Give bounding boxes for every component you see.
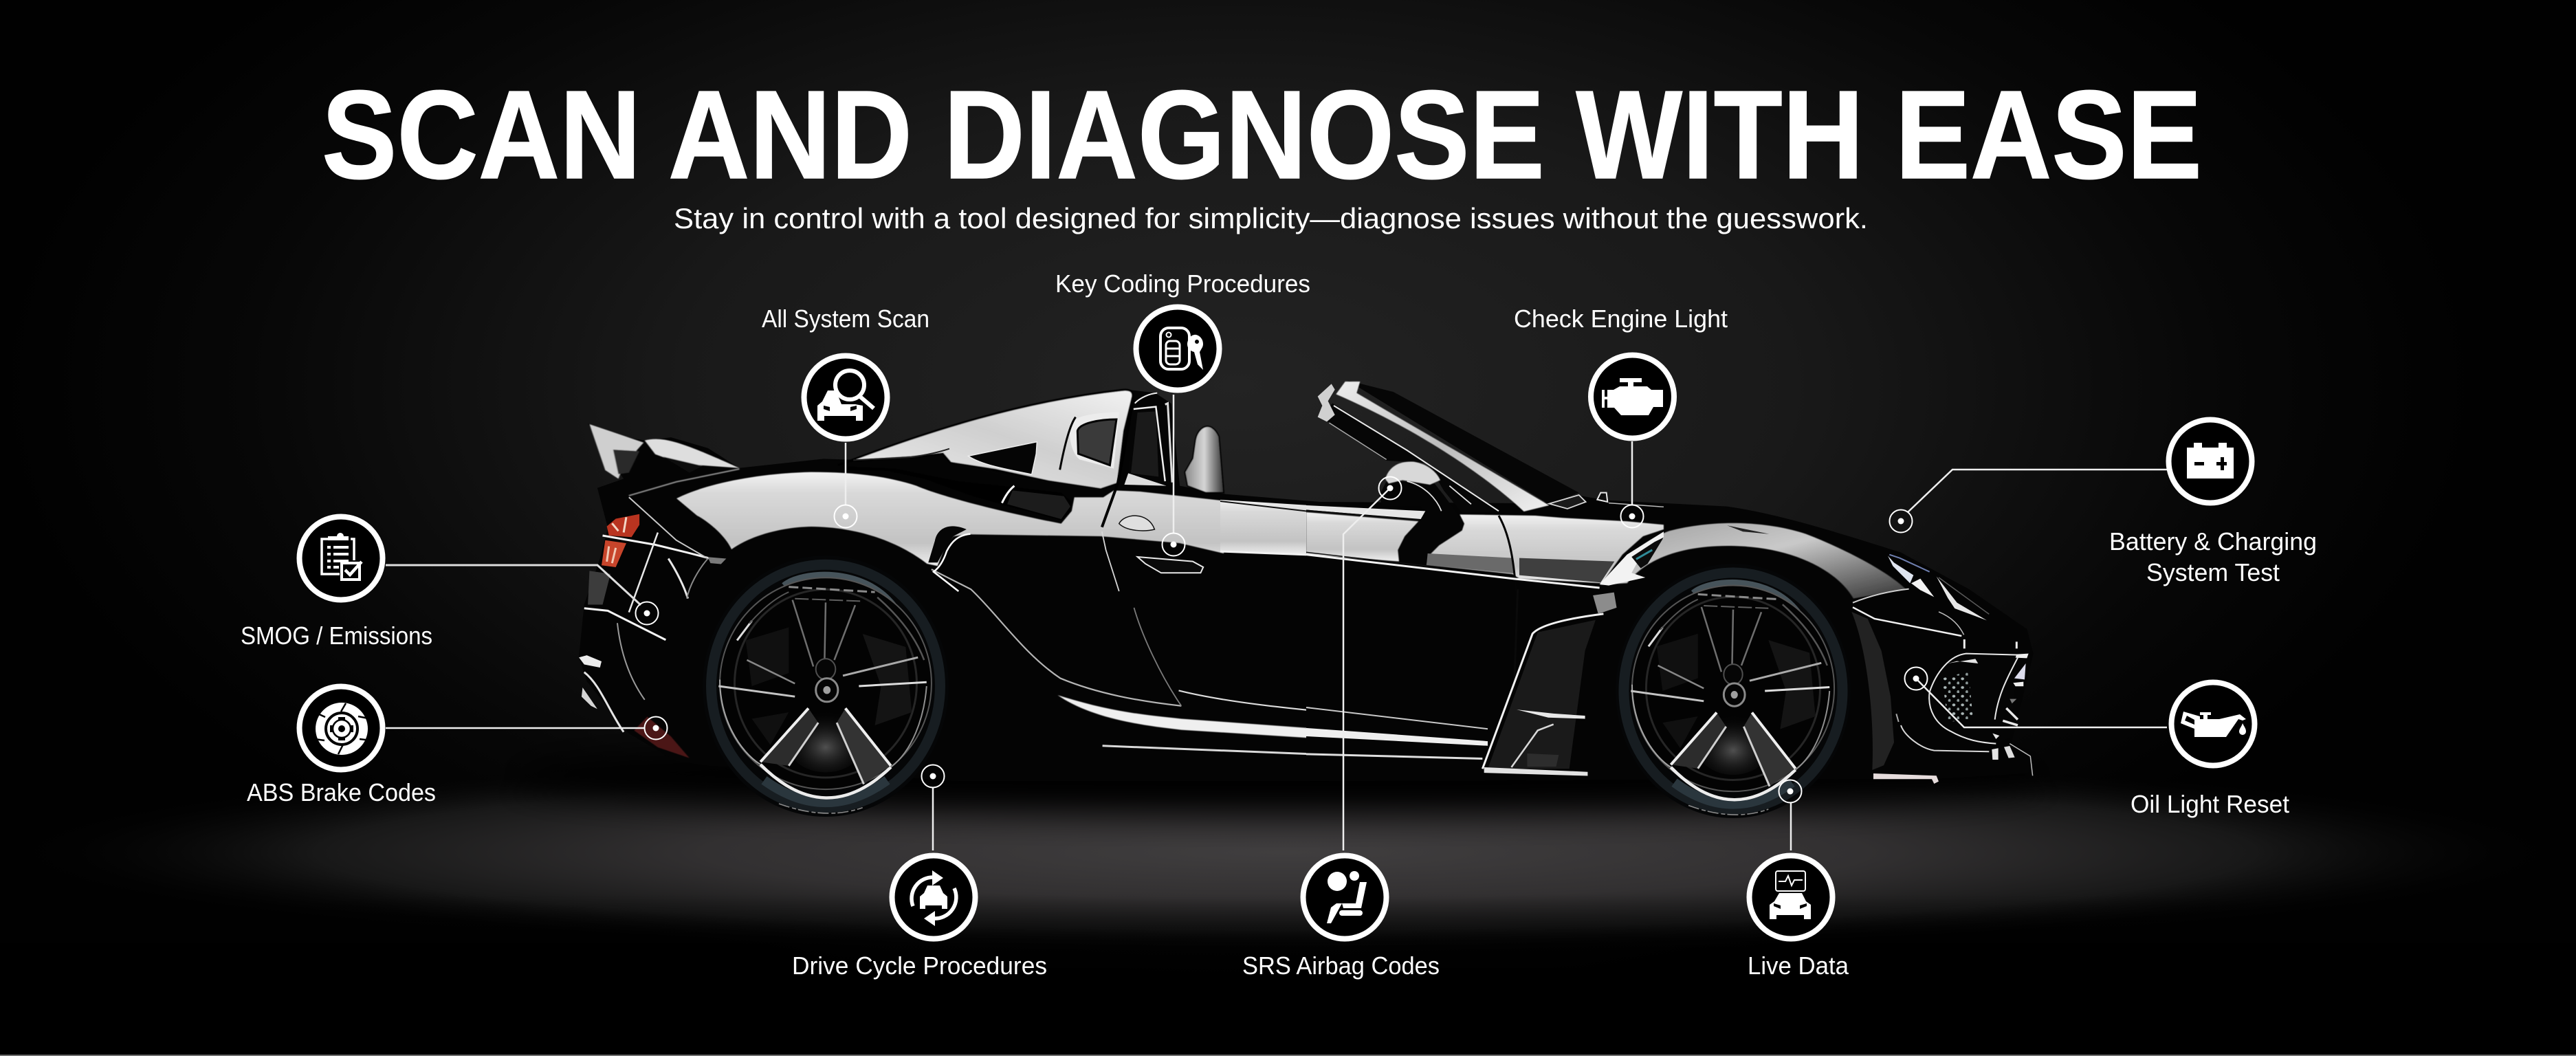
icon: clipboard and checkbox — [322, 533, 362, 580]
icon: circular arrows with car — [912, 870, 956, 926]
icon ring — [300, 517, 382, 600]
body crease line — [1306, 555, 1600, 588]
label: SMOG / Emissions — [241, 622, 432, 650]
callout: all system scan — [762, 305, 929, 528]
side intake — [1488, 620, 1596, 769]
icon: airbag seat — [1327, 871, 1367, 923]
silver cowl panel — [1427, 514, 1664, 583]
car ground shadow — [509, 741, 2049, 813]
icon ring — [892, 855, 975, 939]
icon: key fob and key — [1160, 328, 1203, 370]
leader line — [386, 565, 641, 605]
front arch strip — [1851, 612, 1894, 770]
cowl lower shade — [1427, 553, 1514, 573]
side quarter window — [1060, 412, 1119, 470]
label: ABS Brake Codes — [247, 778, 436, 806]
target marker — [1889, 510, 1913, 532]
callout: battery and charging system test — [1889, 419, 2317, 586]
target marker — [1162, 534, 1185, 556]
side mirror — [1385, 461, 1440, 485]
icon: car with magnifier — [817, 371, 874, 421]
silver door panel — [1306, 512, 1418, 562]
icon: battery — [2187, 443, 2234, 478]
lower door seam and character line — [932, 569, 1181, 706]
icon ring — [2171, 682, 2255, 766]
front nose details — [1851, 555, 2033, 784]
icon: oil can — [2181, 712, 2246, 737]
door seam lower — [1514, 589, 1518, 690]
label: Live Data — [1748, 952, 1849, 980]
icon: engine — [1602, 378, 1663, 415]
leader line — [1631, 441, 1633, 505]
cockpit pillar — [1124, 393, 1180, 487]
callout: drive cycle procedures — [792, 764, 1047, 980]
icon: monitor above car — [1770, 871, 1811, 919]
leader line — [1916, 679, 2167, 727]
rear deck panel — [837, 390, 1133, 490]
door seam — [1499, 516, 1516, 591]
icon ring — [1303, 855, 1386, 939]
bottom fade — [0, 894, 2576, 1056]
fender lines — [1853, 589, 1909, 603]
windshield silver frame — [1336, 382, 1549, 512]
label: Key Coding Procedures — [1055, 270, 1310, 298]
windshield lower black frame — [1320, 404, 1499, 513]
windshield dark strip — [1347, 380, 1579, 504]
target marker — [1621, 505, 1643, 528]
callout: live data — [1748, 780, 1849, 980]
leader line — [1908, 470, 2167, 512]
door top dark line — [1220, 501, 1310, 512]
icon ring — [1136, 307, 1220, 390]
title: SCAN AND DIAGNOSE WITH EASE — [322, 64, 2202, 205]
front splitter — [1873, 773, 1939, 784]
target marker — [1379, 477, 1401, 499]
cowl details — [1549, 495, 1586, 509]
callout: srs airbag codes — [1242, 477, 1440, 980]
rear diffuser glow — [634, 716, 690, 758]
side mirror arm — [1380, 481, 1462, 566]
target marker — [835, 505, 857, 528]
subtitle: Stay in control with a tool designed for simplicity—diagnose issues without the guesswork. — [674, 202, 1868, 234]
bumper details — [1896, 714, 2033, 776]
target marker — [1904, 667, 1928, 690]
windshield end cap — [1318, 384, 1335, 421]
leader line — [845, 443, 846, 505]
headlight — [1888, 555, 1989, 620]
floor light — [0, 749, 2576, 956]
label: All System Scan — [762, 305, 929, 333]
leader line — [1173, 395, 1174, 534]
callout: smog and emissions — [241, 517, 659, 650]
door seam — [1102, 399, 1134, 527]
triangular rear window — [968, 442, 1037, 474]
label: Oil Light Reset — [2131, 790, 2289, 818]
rear panel lines — [603, 536, 710, 558]
car rear deck and cockpit — [676, 390, 1224, 591]
front wheel — [1616, 564, 1851, 818]
front body silhouette — [1306, 496, 2034, 781]
sports car illustration — [579, 380, 2034, 818]
leader line — [1343, 488, 1390, 850]
label: Battery & Charging — [2109, 527, 2317, 556]
leader line — [932, 787, 934, 850]
label: SRS Airbag Codes — [1242, 952, 1440, 980]
door top highlight — [1306, 505, 1425, 519]
target marker — [921, 764, 945, 788]
car front half — [1306, 496, 2034, 781]
label: Check Engine Light — [1514, 305, 1728, 333]
spoiler highlights — [589, 424, 740, 496]
front intake grille — [1929, 654, 2029, 744]
leader line — [1790, 802, 1792, 850]
icon ring — [300, 686, 382, 770]
side sill highlight — [1058, 695, 1375, 742]
icon: brake disc — [315, 703, 371, 755]
sill lines — [1306, 707, 1488, 729]
callout: check engine light — [1514, 305, 1728, 528]
tail light — [607, 514, 639, 537]
windshield, mirror and cowl — [1306, 380, 1664, 591]
label: System Test — [2146, 558, 2280, 586]
icon ring — [1591, 355, 1674, 439]
callout: key coding procedures — [1055, 270, 1310, 556]
door handle — [1138, 557, 1203, 573]
fuel cap — [1119, 516, 1154, 531]
wheel arch recess — [928, 526, 967, 562]
hood sheen — [1601, 523, 1906, 599]
target marker — [1779, 780, 1801, 803]
callout: abs brake codes — [247, 686, 667, 806]
callout: oil light reset — [1904, 667, 2289, 818]
icon ring — [804, 356, 887, 439]
label: Drive Cycle Procedures — [792, 952, 1047, 980]
bottom edge rule — [0, 1055, 2576, 1056]
icon ring — [1749, 855, 1833, 939]
rear wheel — [703, 556, 949, 817]
icon ring — [2168, 419, 2252, 503]
leader line — [386, 727, 645, 729]
exhaust — [579, 655, 602, 668]
rear body silhouette — [579, 390, 1375, 781]
car rear half — [579, 390, 1375, 781]
black air intake band — [847, 466, 1072, 520]
label — [2109, 527, 2317, 586]
target marker — [635, 602, 659, 624]
silver body side panel — [676, 472, 1224, 566]
seat — [1185, 426, 1224, 493]
door crease line — [1220, 551, 1310, 555]
fender vent — [1600, 531, 1664, 586]
door panel bridge — [1220, 500, 1310, 555]
target marker — [645, 716, 667, 740]
